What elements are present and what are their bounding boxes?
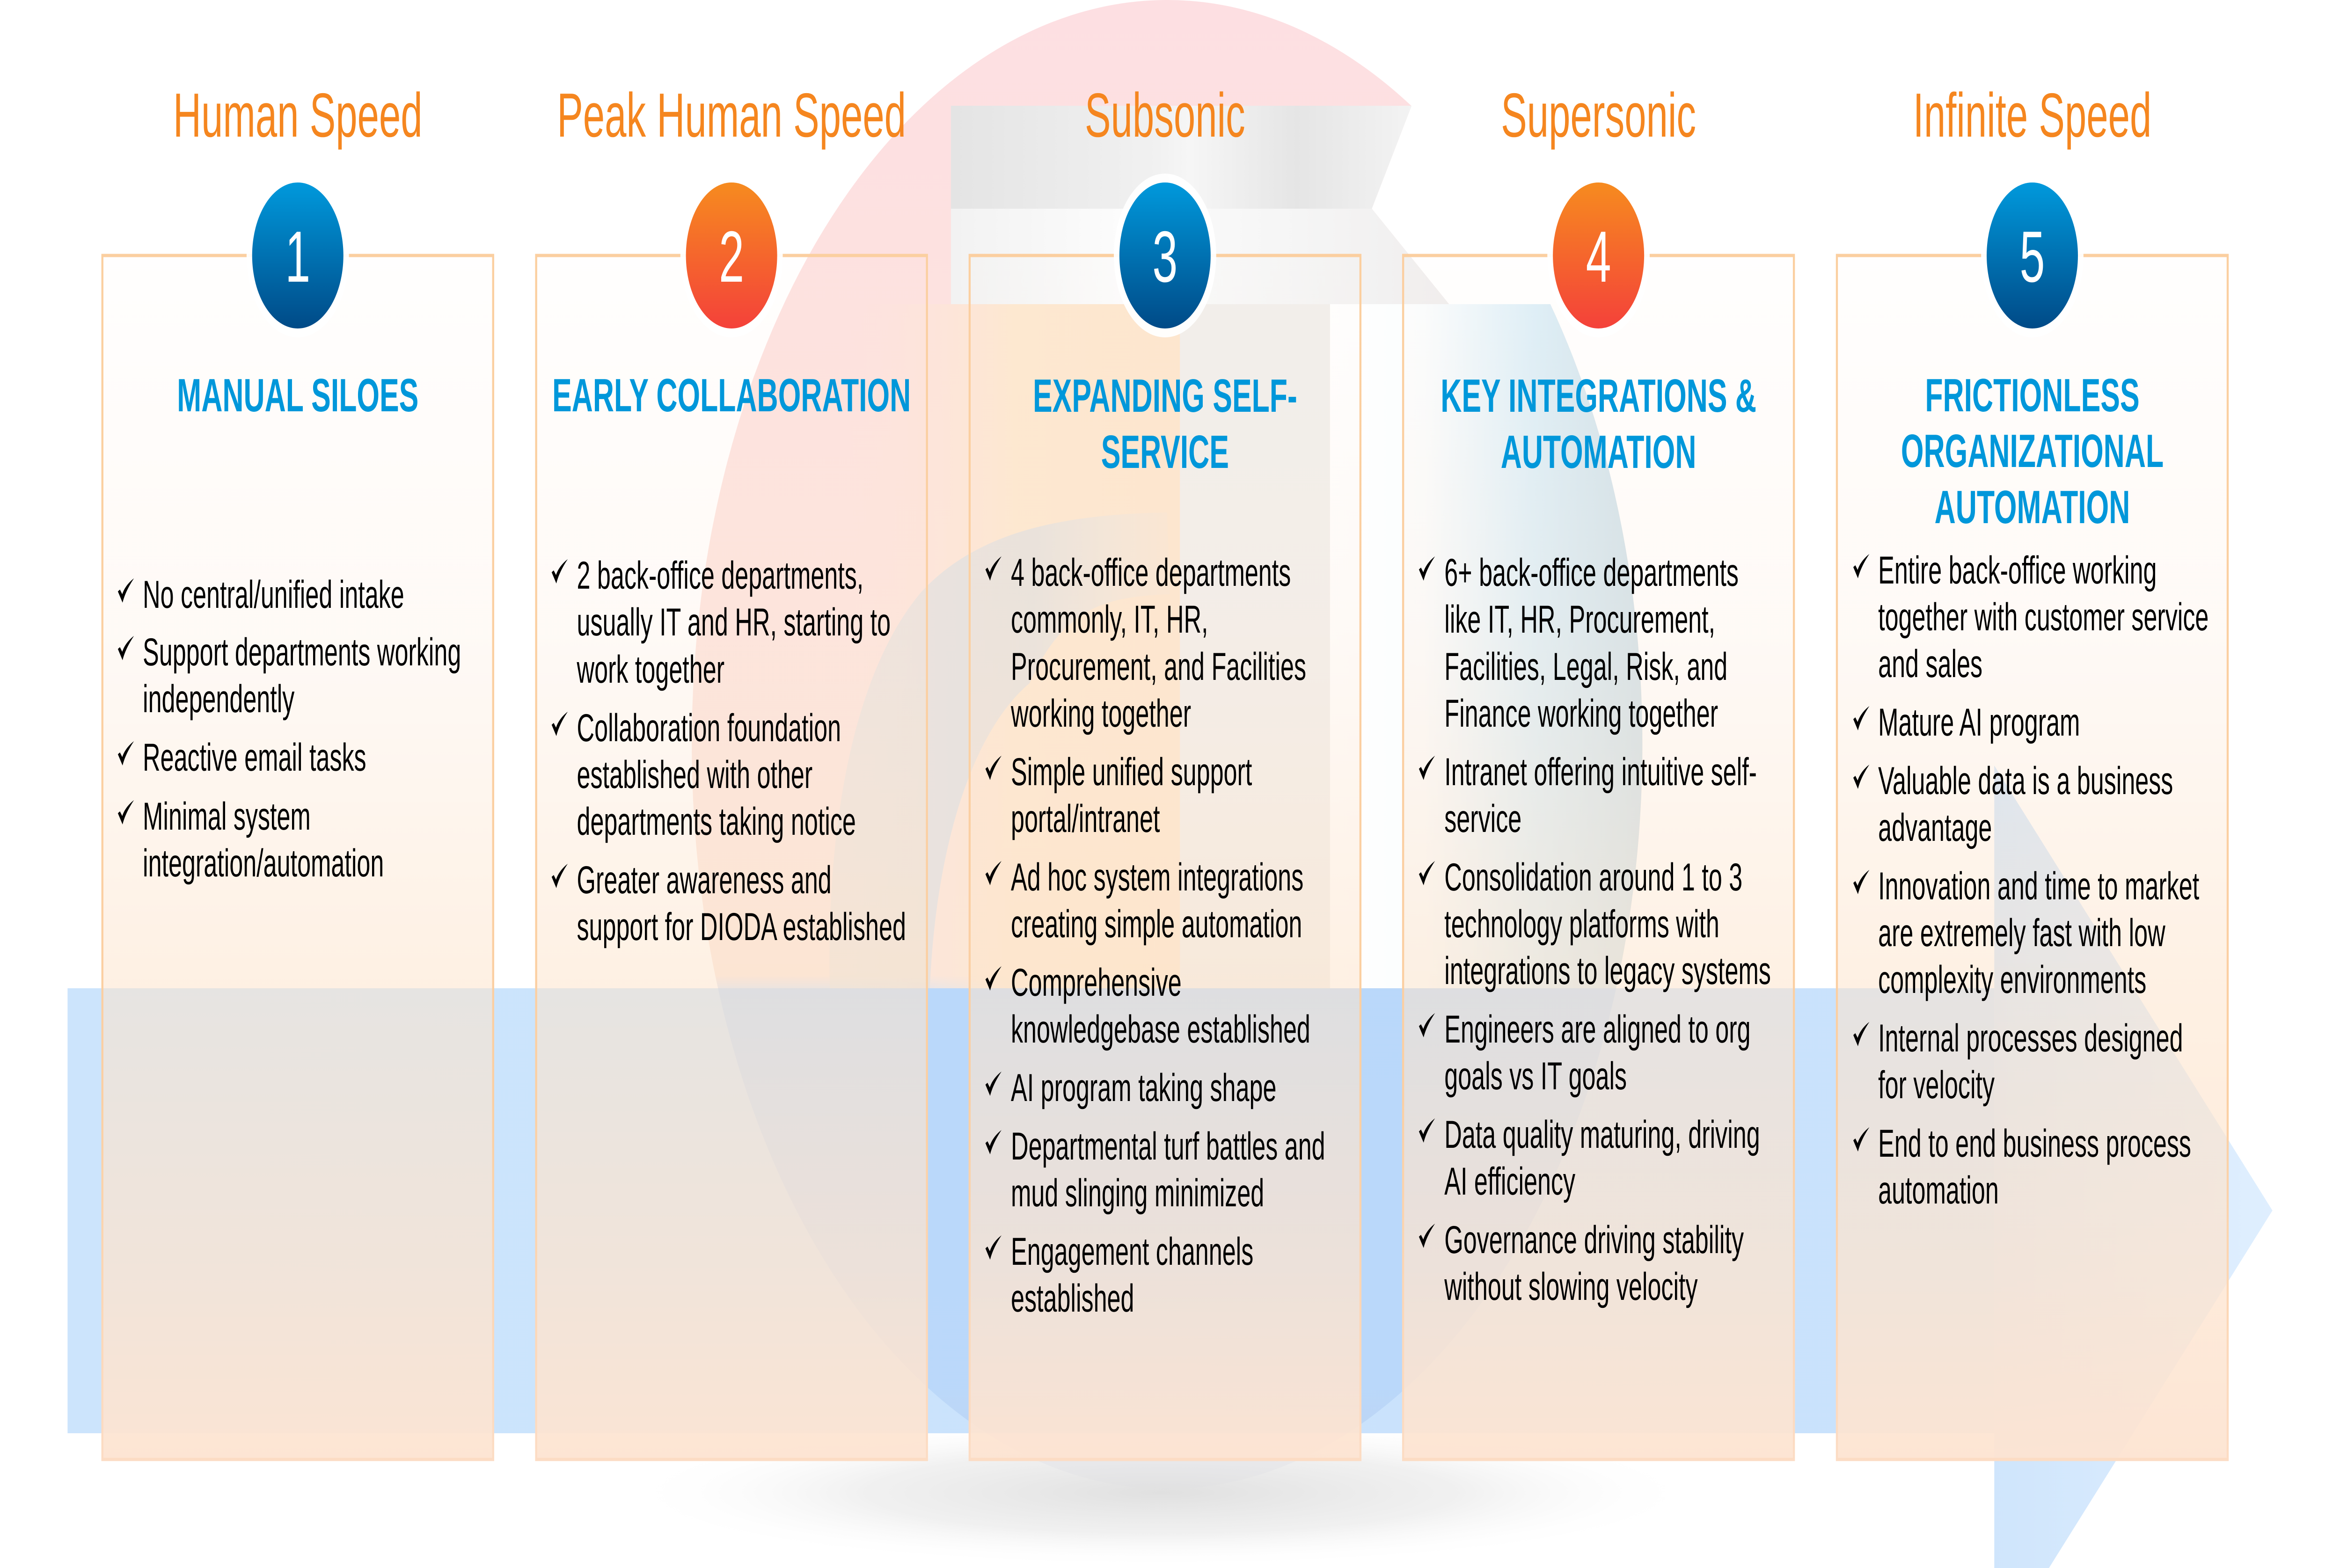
stage 2 checklist: departments taking notice [577, 800, 856, 843]
stage 1 heading: MANUAL SILOES [177, 369, 418, 422]
stage 5 checklist: advantage [1878, 806, 1992, 849]
stage 2 number badge: 2 [719, 216, 744, 297]
stage 2 checklist: established with other [577, 753, 812, 796]
stage 2 checklist: Collaboration foundation [577, 706, 841, 750]
stage 3 checklist: Comprehensive [1011, 961, 1182, 1004]
stage 4 number badge: 4 [1586, 216, 1611, 297]
stage 4 number badge [1547, 174, 1650, 337]
stage 3 number badge [1114, 174, 1216, 337]
arrow shaft [67, 988, 1994, 1433]
stage 5 checklist: Internal processes designed [1878, 1016, 2183, 1060]
stage 2 speed title: Peak Human Speed [557, 80, 906, 150]
stage 1 checklist: Reactive email tasks [143, 736, 366, 779]
panel: stage 1 Human Speed [102, 80, 493, 1459]
stage 5 checklist: together with customer service [1878, 595, 2208, 639]
emblem: gray swoosh [829, 512, 1170, 988]
stage 5 heading: FRICTIONLESS [1925, 369, 2140, 422]
stage 4 heading [1441, 370, 1756, 478]
stage 5 checklist: are extremely fast with low [1878, 911, 2165, 955]
stage 3 heading: EXPANDING SELF- [1033, 370, 1297, 422]
stage 1 checklist: Minimal system [143, 795, 311, 838]
stage 4 checklist: Consolidation around 1 to 3 [1444, 855, 1742, 899]
stage 3 checklist: Engagement channels [1011, 1230, 1253, 1273]
stage 5 heading: ORGANIZATIONAL [1901, 425, 2164, 477]
emblem: dome circle [692, 0, 1642, 1489]
stage 2 checklist: work together [577, 648, 724, 691]
stage 5 checklist [1853, 548, 2208, 1212]
stage 3 checklist: knowledgebase established [1011, 1007, 1310, 1051]
stage 3 heading: SERVICE [1101, 426, 1229, 478]
stage 5 number badge: 5 [2020, 216, 2045, 297]
arrow head [1994, 766, 2273, 1568]
stage 3 checklist: Simple unified support [1011, 750, 1252, 794]
stage 4 checklist: Facilities, Legal, Risk, and [1444, 645, 1727, 688]
stage 2 checklist: 2 back-office departments, [577, 554, 863, 597]
stage 2 card [536, 255, 927, 1459]
stage 3 checklist: creating simple automation [1011, 902, 1302, 946]
stage 3 number badge: 3 [1152, 216, 1177, 297]
stage 4 checklist: technology platforms with [1444, 902, 1719, 946]
stage 3 checklist: commonly, IT, HR, [1011, 598, 1208, 641]
stage 1 checklist: integration/automation [143, 841, 384, 885]
stage 5 checklist: Innovation and time to market [1878, 864, 2199, 908]
stage 3 speed title: Subsonic [1085, 80, 1245, 150]
stage 1 card [102, 255, 493, 1459]
stage 4 checklist: Governance driving stability [1444, 1218, 1744, 1262]
stage 5 number badge [1981, 174, 2084, 337]
stage 3 checklist: Procurement, and Facilities [1011, 645, 1306, 688]
stage 3 heading [1033, 370, 1297, 478]
stage 4 checklist [1419, 551, 1771, 1308]
stage 5 speed title: Infinite Speed [1913, 80, 2151, 150]
stage 2 checklist: usually IT and HR, starting to [577, 600, 891, 644]
stage 3 checklist: working together [1010, 692, 1191, 735]
stage 2 checklist: support for DIODA established [577, 905, 906, 948]
stage 4 heading: AUTOMATION [1501, 426, 1696, 478]
stage 5 checklist: automation [1878, 1168, 1999, 1212]
stage 3 checklist: Departmental turf battles and [1011, 1124, 1325, 1168]
emblem: second light band [951, 209, 1449, 304]
stage 3 checklist [986, 551, 1325, 1320]
stage 3 checklist: 4 back-office departments [1011, 551, 1291, 594]
stage 2 checklist: Greater awareness and [577, 858, 832, 902]
panel: stage 5 Infinite Speed [1837, 80, 2228, 1459]
stage 4 card [1403, 255, 1794, 1459]
stage 4 checklist: Finance working together [1444, 692, 1718, 735]
panel: stage 4 Supersonic [1403, 80, 1794, 1459]
stage 4 checklist: goals vs IT goals [1444, 1054, 1627, 1098]
stage 4 checklist: Data quality maturing, driving [1444, 1113, 1760, 1156]
background rocket emblem [692, 0, 1667, 1489]
blue progress arrow [67, 766, 2273, 1568]
stage 3 checklist: mud slinging minimized [1011, 1171, 1264, 1215]
stage 3 checklist: portal/intranet [1011, 797, 1160, 840]
stage 4 checklist: integrations to legacy systems [1444, 949, 1771, 992]
stage 5 checklist: for velocity [1878, 1063, 1995, 1107]
stage 4 checklist: 6+ back-office departments [1444, 551, 1739, 594]
stage 5 checklist: End to end business process [1878, 1122, 2191, 1165]
stage 1 checklist: No central/unified intake [143, 573, 404, 616]
stage 1 checklist [118, 573, 461, 885]
emblem: inner body panels [930, 304, 1643, 988]
stage 1 number badge [247, 174, 349, 337]
stage 2 heading: EARLY COLLABORATION [552, 369, 911, 422]
stage 4 checklist: AI efficiency [1444, 1160, 1575, 1203]
stage 5 card [1837, 255, 2228, 1459]
stage 5 checklist: Valuable data is a business [1878, 759, 2173, 802]
stage 5 checklist: Mature AI program [1878, 700, 2080, 744]
stage 4 checklist: without slowing velocity [1444, 1265, 1698, 1308]
stage 5 heading [1901, 369, 2164, 533]
stage 2 number badge [680, 174, 782, 337]
stage 3 checklist: AI program taking shape [1011, 1066, 1276, 1109]
stage 4 checklist: service [1444, 797, 1521, 840]
stage 3 checklist: Ad hoc system integrations [1011, 855, 1303, 899]
stage 5 checklist: and sales [1878, 642, 1982, 686]
emblem: top gray band [951, 106, 1411, 209]
panel: stage 3 Subsonic [970, 80, 1360, 1459]
stage 4 checklist: Engineers are aligned to org [1444, 1007, 1751, 1051]
stage 5 checklist: complexity environments [1878, 958, 2146, 1001]
stage 4 heading: KEY INTEGRATIONS & [1441, 370, 1756, 422]
stage 1 checklist: independently [143, 677, 295, 721]
stage 4 checklist: like IT, HR, Procurement, [1444, 598, 1715, 641]
stage 1 checklist: Support departments working [143, 630, 461, 674]
stage 2 checklist [552, 554, 906, 948]
stage 1 speed title: Human Speed [173, 80, 423, 150]
stage 4 checklist: Intranet offering intuitive self- [1444, 750, 1757, 794]
panel: stage 2 Peak Human Speed [536, 80, 927, 1459]
stage 3 checklist: established [1011, 1276, 1134, 1320]
emblem: white notch [1372, 0, 1667, 304]
ground shadow [620, 1418, 1703, 1568]
stage 4 speed title: Supersonic [1501, 80, 1696, 150]
stage 3 card [970, 255, 1360, 1459]
stage 5 checklist: Entire back-office working [1878, 548, 2157, 592]
stage 1 number badge: 1 [285, 216, 310, 297]
stage 5 heading: AUTOMATION [1935, 481, 2130, 533]
